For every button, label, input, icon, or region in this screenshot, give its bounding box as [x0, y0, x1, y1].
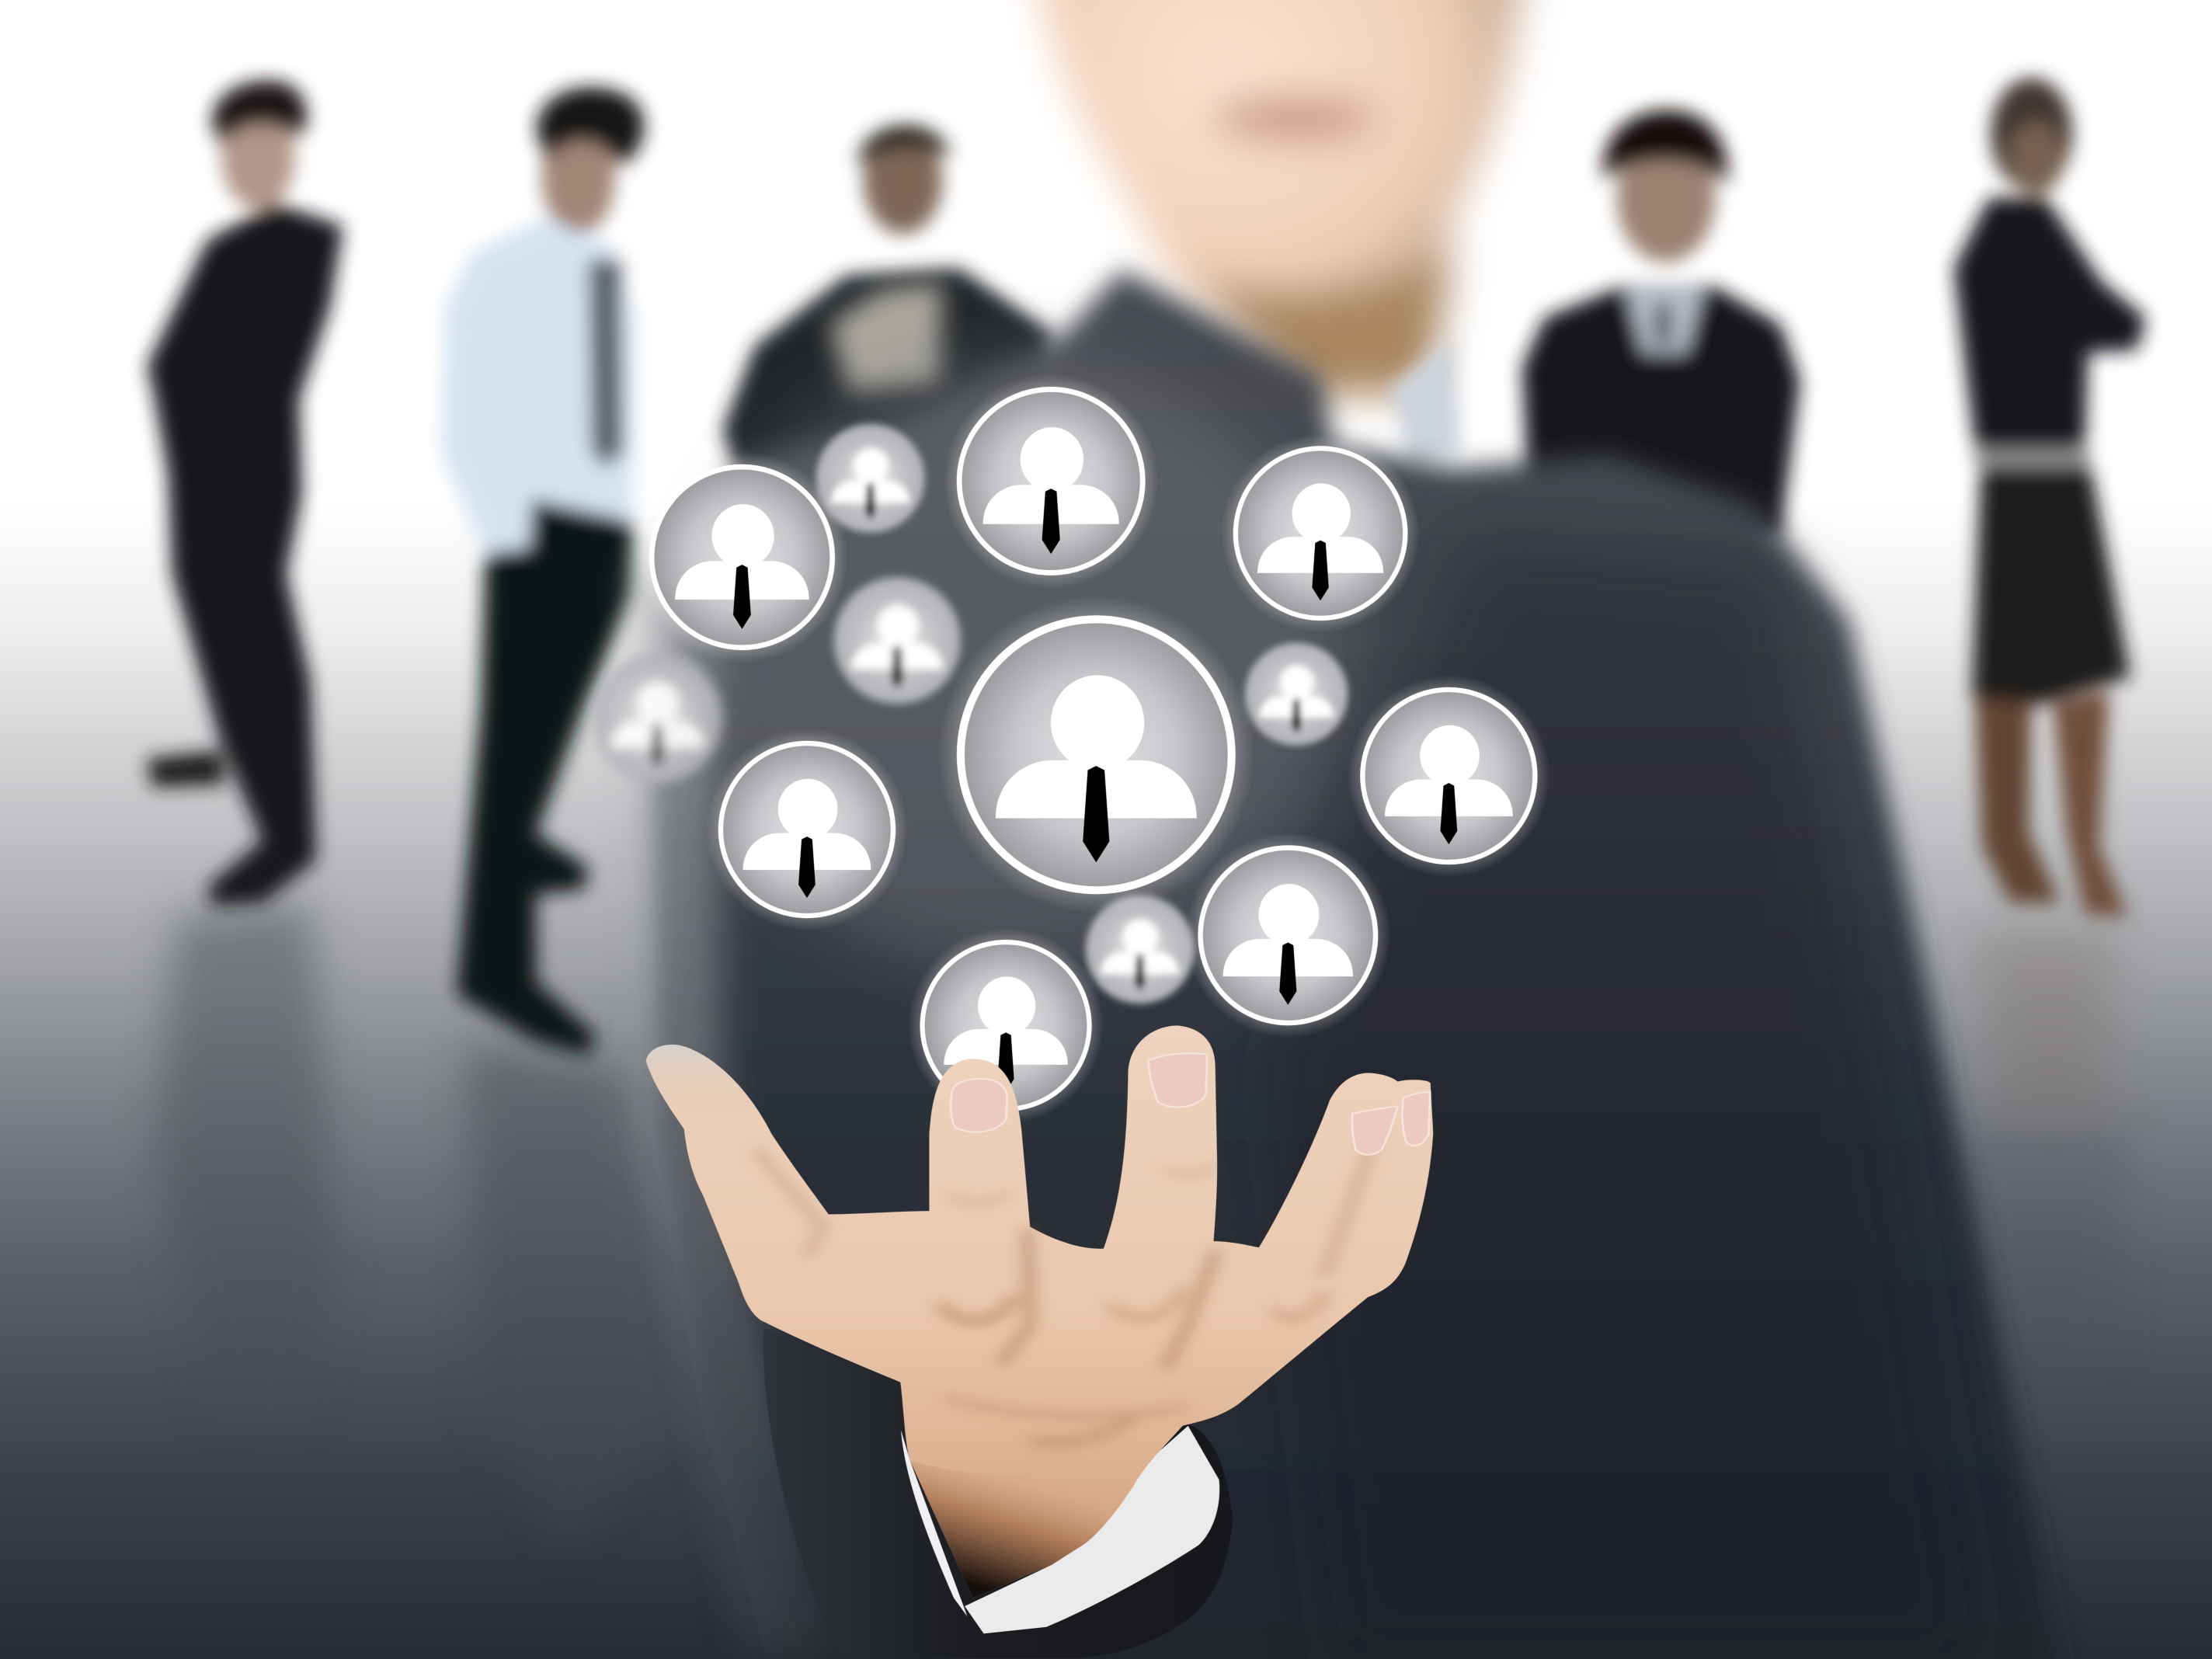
icon: small blurred node right — [1245, 642, 1348, 746]
shirt cuff edge — [901, 1430, 968, 1616]
icon: small blurred node top — [816, 424, 925, 533]
blurred small person icons — [593, 424, 1348, 1003]
person: far left in black suit — [147, 81, 343, 906]
shirt front — [830, 282, 942, 392]
central person: shirt collar — [1389, 339, 1462, 465]
person: white shirt and tie — [442, 87, 644, 1056]
icon: lower node touching the finger — [908, 927, 1104, 1124]
sleeve cuff — [763, 1328, 1233, 1658]
person: behind centre left — [722, 125, 1051, 480]
shirt cuff lining — [965, 1426, 1219, 1633]
icon: small blurred node centre left — [833, 577, 961, 704]
floor reflections of the team — [148, 889, 2121, 1330]
icon: large central node — [937, 596, 1255, 914]
soft left edge of the suit — [638, 565, 833, 1659]
central person: face and neck — [1027, 0, 1526, 395]
suit highlight behind icons — [691, 353, 1341, 973]
hand shading — [757, 1133, 1376, 1442]
suit light and shadow — [638, 353, 1975, 1659]
icon: top centre node — [943, 374, 1159, 589]
icon: left node — [705, 729, 908, 930]
suit shadow on the right — [1270, 536, 1975, 1659]
icon: top right node — [1221, 433, 1420, 633]
icon: small blurred node lower — [1086, 895, 1195, 1003]
head — [857, 125, 951, 235]
body — [722, 268, 1051, 480]
icon: top left node — [636, 451, 848, 663]
icon: lower right node — [1185, 833, 1391, 1038]
background gradient — [0, 561, 2212, 1659]
icon: right node — [1348, 675, 1550, 877]
person: woman far right — [1954, 78, 2146, 917]
central person: suit — [660, 270, 2060, 1659]
sharp person icons — [636, 374, 1550, 1124]
person: right in suit — [1522, 110, 1800, 536]
hand and sleeve — [646, 1025, 1433, 1658]
fingernails — [951, 1053, 1430, 1155]
icon: faded node far left — [593, 653, 722, 783]
thumb tip fade — [646, 1045, 771, 1133]
hand — [646, 1025, 1433, 1598]
wrist shadow — [910, 1461, 1133, 1598]
